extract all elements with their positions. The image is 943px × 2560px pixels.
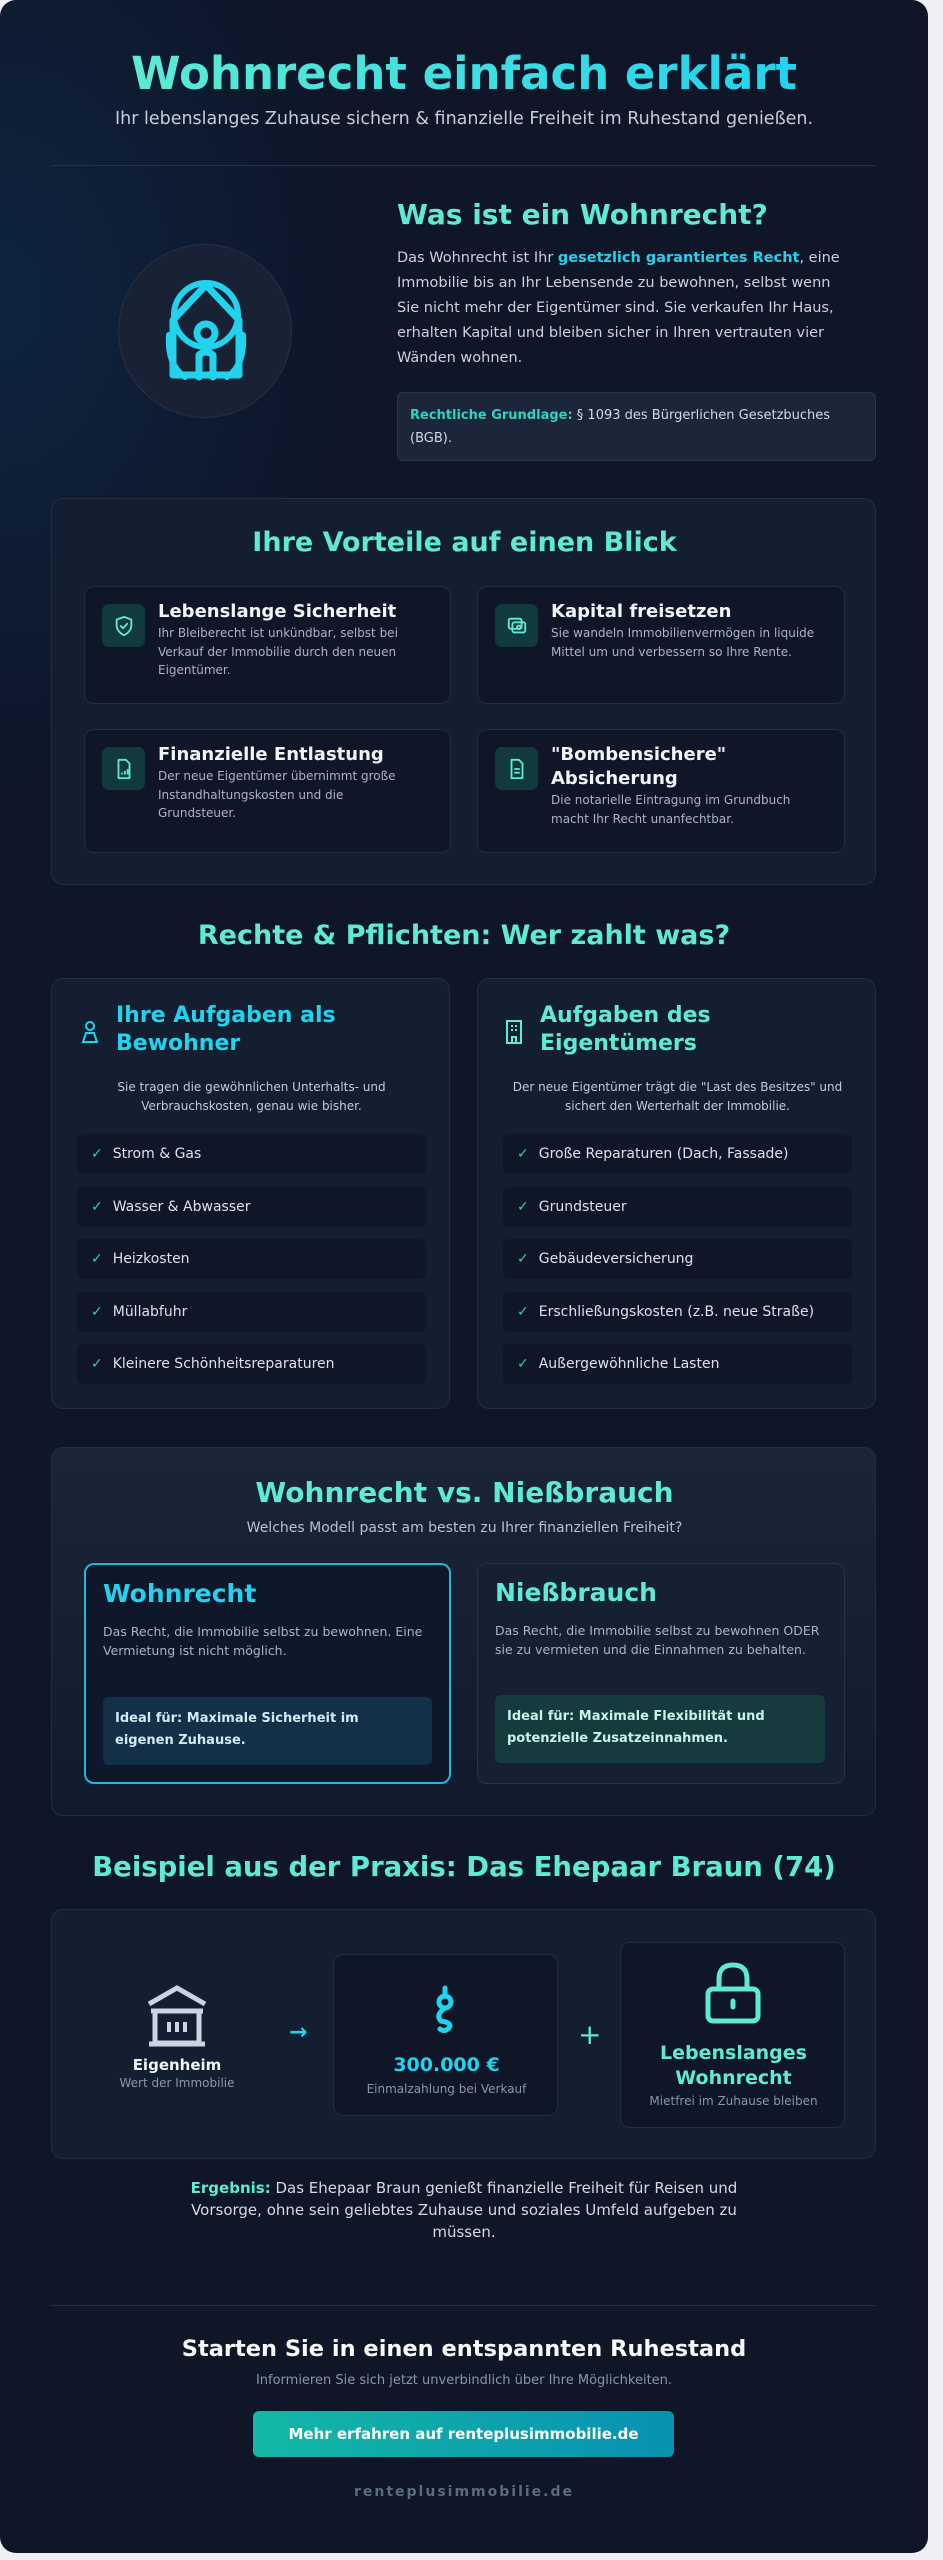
heading: Ihre Vorteile auf einen Blick [252, 527, 677, 558]
panel: Vorteile [51, 498, 876, 885]
card: Bombensichere Absicherung: "Bombensichere" Absicherung [551, 744, 726, 789]
text: Sie tragen die gewöhnlichen Unterhalts- und Verbrauchskosten, genau wie bisher. [117, 1080, 386, 1113]
callout: legal basis [397, 392, 876, 461]
panel: Bewohner [51, 978, 450, 1409]
text: CTA subtitle: Informieren Sie sich jetzt unverbindlich über Ihre Möglichkeiten. [256, 2373, 672, 2388]
box: Lebenslanges Wohnrecht: Wohnrecht [675, 2067, 792, 2089]
icon: person [82, 1021, 98, 1043]
icon: document [495, 747, 538, 790]
text: Ergebnis: Ergebnis: Das Ehepaar Braun genießt finanzielle Freiheit für Reisen und Vorsorge, ohne sein geliebtes Zuhause und soziales Umfeld aufgeben zu müssen. [191, 2179, 737, 2241]
list: ✓ Müllabfuhr [91, 1304, 187, 1320]
heading [540, 1003, 711, 1056]
icon: document chart [102, 747, 145, 790]
footer: renteplusimmobilie.de [354, 2484, 574, 2500]
box: 300.000 €: Einmalzahlung bei Verkauf [367, 2082, 526, 2096]
button [253, 2411, 674, 2457]
item: Eigenheim: Eigenheim [133, 2056, 221, 2074]
card: Lebenslange Sicherheit: Lebenslange Sicherheit [158, 601, 396, 622]
box: 300.000 €: 300.000 € [393, 2054, 500, 2076]
item: Eigenheim: Wert der Immobilie [119, 2076, 234, 2090]
subtitle: Welches Modell passt am besten zu Ihrer finanziellen Freiheit? [247, 1520, 682, 1536]
list: ✓ Kleinere Schönheitsreparaturen [91, 1356, 335, 1372]
heading: Aufgaben des [540, 1003, 711, 1028]
card: Finanzielle Entlastung: Der neue Eigentümer übernimmt große Instandhaltungskosten und die Grundsteuer. [158, 769, 396, 820]
arrow: → [289, 2020, 307, 2045]
icon: building [506, 1020, 522, 1044]
list: ✓ Gebäudeversicherung [517, 1251, 693, 1267]
text: Der neue Eigentümer trägt die "Last des Besitzes" und sichert den Werterhalt der Immobilie. [513, 1080, 842, 1113]
box: Lebenslanges Wohnrecht: Mietfrei im Zuhause bleiben [649, 2094, 818, 2108]
card: Lebenslange Sicherheit: Ihr Bleiberecht ist unkündbar, selbst bei Verkauf der Immobilie durch den neuen Eigentümer. [158, 626, 398, 677]
list [77, 1134, 426, 1384]
icon: lock [706, 1962, 760, 2024]
callout: legal basis: Rechtliche Grundlage: § 1093 des Bürgerlichen Gesetzbuches (BGB). [410, 408, 830, 446]
list [503, 1134, 852, 1384]
callout [103, 1697, 432, 1765]
card: Wohnrecht: Wohnrecht [103, 1579, 256, 1608]
list: ✓ Große Reparaturen (Dach, Fassade) [517, 1146, 789, 1162]
list: ✓ Heizkosten [91, 1251, 190, 1267]
card: Bombensichere Absicherung: Die notarielle Eintragung im Grundbuch macht Ihr Recht unanfechtbar. [551, 793, 790, 826]
card: Nießbrauch [477, 1563, 845, 1784]
heading: Ihre Aufgaben als [116, 1003, 336, 1028]
callout [495, 1695, 825, 1763]
card: Wohnrecht [84, 1563, 451, 1784]
card: Wohnrecht: Das Recht, die Immobilie selbst zu bewohnen. Eine Vermietung ist nicht möglich. [103, 1624, 422, 1658]
text: definition: Das Wohnrecht ist Ihr gesetzlich garantiertes Recht, eine Immobilie bis an Ihr Lebensende zu bewohnen, selbst wenn Sie nicht mehr der Eigentümer sind. Sie verkaufen Ihr Haus, erhalten Kapital und bleiben sicher in Ihren vertrauten vier Wänden wohnen. [397, 250, 840, 366]
heading: Wohnrecht vs. Nießbrauch [255, 1476, 674, 1509]
heading: Beispiel: Beispiel aus der Praxis: Das Ehepaar Braun (74) [92, 1851, 836, 1883]
card: Lebenslange Sicherheit [84, 586, 451, 704]
heading: Bewohner [116, 1031, 240, 1056]
plus: + [578, 2018, 601, 2051]
panel: example flow [51, 1909, 876, 2159]
card: Nießbrauch: Nießbrauch [495, 1578, 657, 1607]
box: 300.000 € [333, 1954, 558, 2116]
box: Lebenslanges Wohnrecht: Lebenslanges [660, 2042, 807, 2064]
list: ✓ Grundsteuer [517, 1199, 627, 1215]
card: Nießbrauch: Das Recht, die Immobilie selbst zu bewohnen ODER sie zu vermieten und die Einnahmen zu behalten. [495, 1623, 819, 1656]
item: Eigenheim [119, 1985, 234, 2090]
icon: house in circle [118, 244, 292, 418]
heading: Rechte & Pflichten: Rechte & Pflichten: Wer zahlt was? [198, 920, 730, 951]
box: Lebenslanges Wohnrecht [620, 1942, 845, 2128]
list: ✓ Außergewöhnliche Lasten [517, 1356, 719, 1372]
card: Kapital freisetzen [477, 586, 845, 704]
panel: Eigentümer [477, 978, 876, 1409]
icon: shield [102, 604, 145, 647]
heading: Was ist ein Wohnrecht: Was ist ein Wohnrecht? [397, 198, 768, 231]
card: Kapital freisetzen: Kapital freisetzen [551, 601, 731, 622]
heading: Eigentümers [540, 1031, 697, 1056]
callout: Ideal für: Maximale Sicherheit im eigenen Zuhause. [115, 1711, 359, 1748]
heading: CTA: Starten Sie in einen entspannten Ruhestand [182, 2336, 746, 2362]
icon: money bag [436, 1986, 454, 2033]
icon: money [495, 604, 538, 647]
heading [116, 1003, 336, 1056]
card: Finanzielle Entlastung [84, 729, 451, 853]
button: Mehr erfahren auf renteplusimmobilie.de [288, 2425, 639, 2443]
callout: Ideal für: Maximale Flexibilität und potenzielle Zusatzeinnahmen. [507, 1709, 765, 1746]
title: Wohnrecht einfach erklärt [131, 47, 797, 100]
card: Bombensichere Absicherung [477, 729, 845, 853]
panel: Wohnrecht vs Nießbrauch [51, 1447, 876, 1816]
list: ✓ Wasser & Abwasser [91, 1199, 250, 1215]
card: Kapital freisetzen: Sie wandeln Immobilienvermögen in liquide Mittel um und verbessern so Ihre Rente. [551, 626, 814, 658]
subtitle: Ihr lebenslanges Zuhause sichern & finanzielle Freiheit im Ruhestand genießen. [115, 109, 813, 129]
list: ✓ Erschließungskosten (z.B. neue Straße) [517, 1304, 814, 1320]
list: ✓ Strom & Gas [91, 1146, 201, 1162]
card: Finanzielle Entlastung: Finanzielle Entlastung [158, 744, 384, 765]
